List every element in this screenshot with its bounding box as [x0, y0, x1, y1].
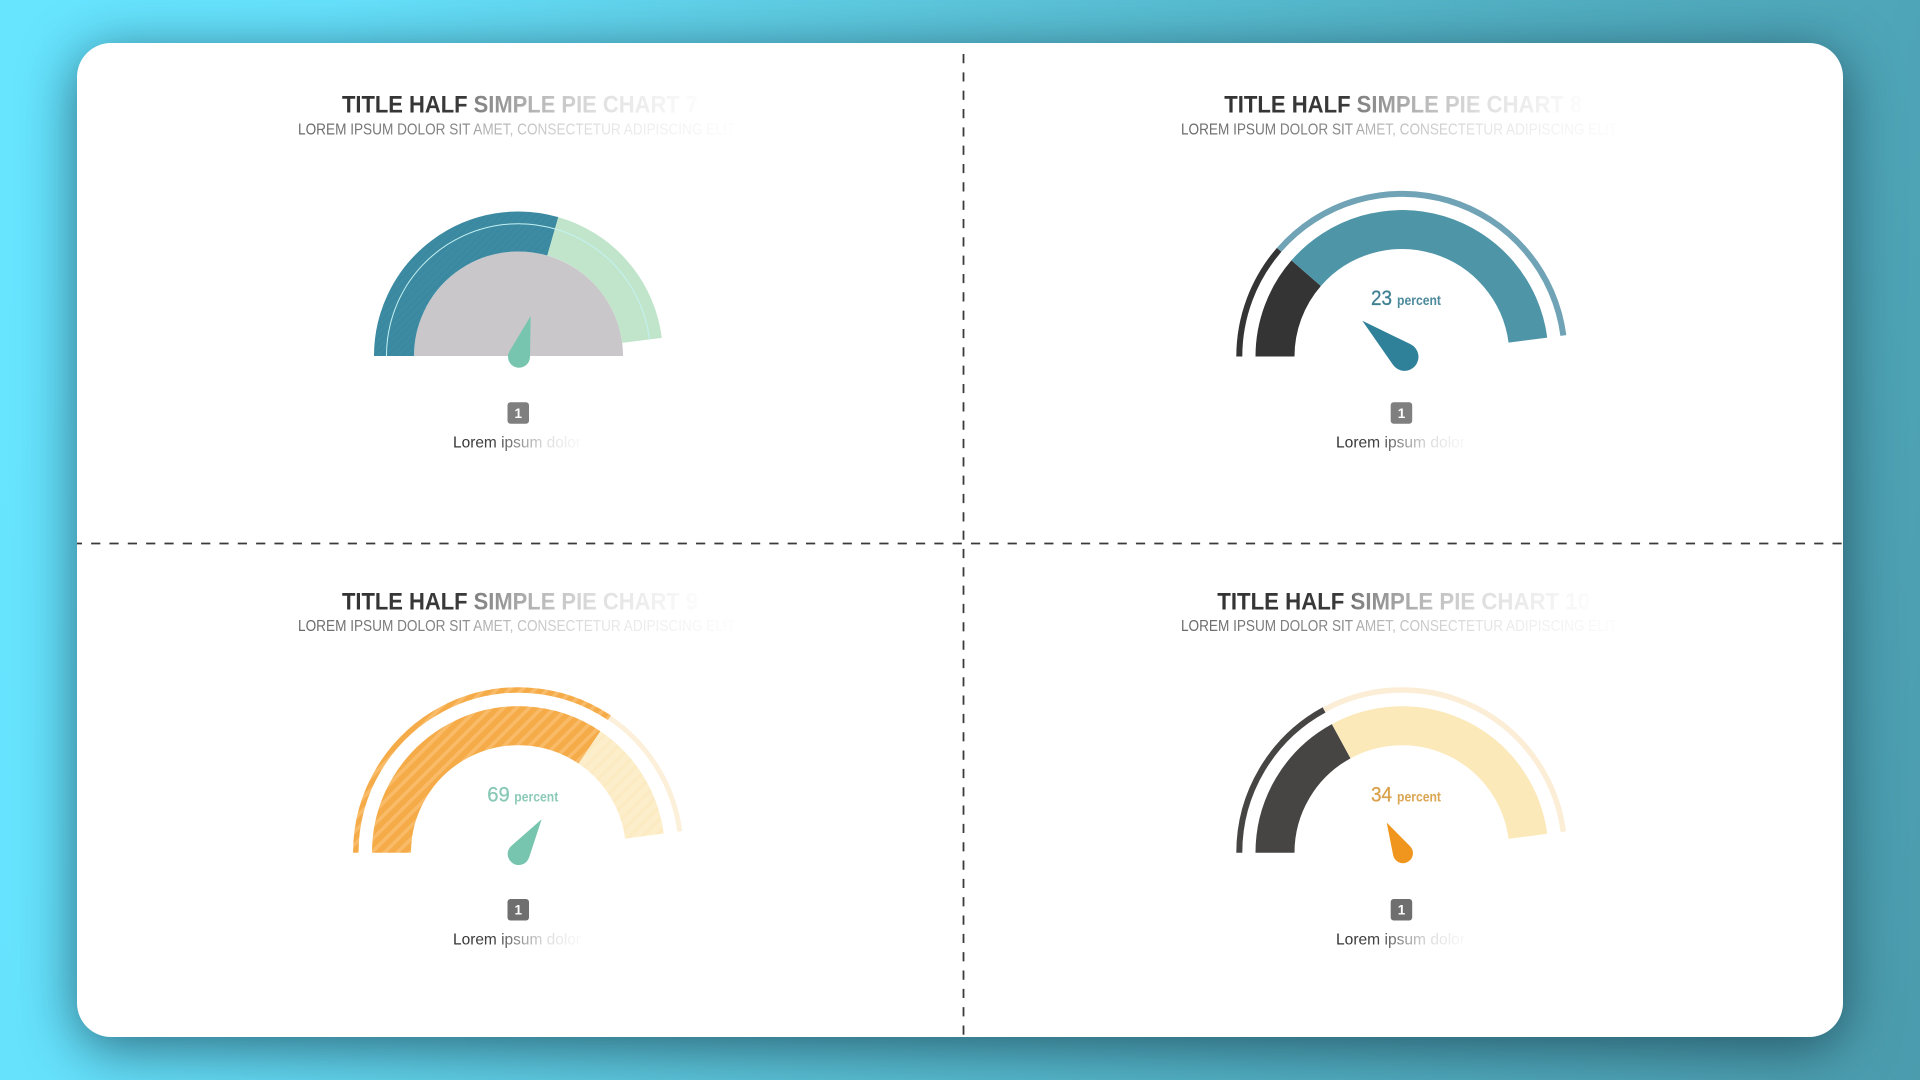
number badge: 1: [515, 406, 523, 421]
subheading: LOREM IPSUM DOLOR SIT AMET, CONSECTETUR ADIPISCING ELIT: [1181, 618, 1617, 635]
heading: TITLE HALF SIMPLE PIE CHART 8: [1224, 92, 1582, 118]
number badge: [508, 899, 529, 920]
value: 34 percent: percent: [1397, 790, 1441, 805]
vertical dashed divider: [962, 54, 964, 1037]
needle: [505, 313, 541, 370]
label: Lorem ipsum dolor: [1336, 931, 1466, 948]
panel: pie chart 7: [298, 92, 735, 452]
value: 34 percent: [1371, 784, 1441, 807]
subheading: LOREM IPSUM DOLOR SIT AMET, CONSECTETUR ADIPISCING ELIT: [1181, 121, 1617, 138]
number badge: [508, 402, 529, 424]
value: 23 percent: 23: [1371, 287, 1392, 310]
gauge chart: [1239, 690, 1563, 853]
gauge chart: [386, 224, 650, 356]
needle: [1378, 818, 1416, 867]
heading: TITLE HALF SIMPLE PIE CHART 10: [1217, 588, 1590, 615]
value: 69 percent: [487, 784, 559, 807]
value: 34 percent: 34: [1371, 784, 1392, 807]
subheading: LOREM IPSUM DOLOR SIT AMET, CONSECTETUR ADIPISCING ELIT: [298, 121, 735, 138]
number badge: [1391, 899, 1412, 920]
number badge: 1: [515, 903, 523, 918]
number badge: 1: [1398, 903, 1406, 918]
gauge chart: [1239, 194, 1563, 356]
label: Lorem ipsum dolor: [1336, 435, 1466, 452]
value: 23 percent: [1371, 287, 1441, 310]
needle: [503, 813, 551, 869]
number badge: [1391, 402, 1412, 424]
panel: pie chart 10: [1181, 588, 1617, 948]
heading: TITLE HALF SIMPLE PIE CHART 7: [342, 92, 698, 118]
label: Lorem ipsum dolor: [453, 435, 582, 452]
value: 69 percent: 69: [487, 784, 510, 807]
value: 69 percent: percent: [514, 790, 559, 805]
gauge chart: [356, 690, 680, 853]
panel: pie chart 9: [298, 588, 735, 948]
subheading: LOREM IPSUM DOLOR SIT AMET, CONSECTETUR ADIPISCING ELIT: [298, 618, 735, 635]
heading: TITLE HALF SIMPLE PIE CHART 9: [342, 588, 698, 615]
horizontal dashed divider: [77, 542, 1843, 544]
number badge: 1: [1398, 406, 1406, 421]
panel: pie chart 8: [1181, 92, 1617, 452]
value: 23 percent: percent: [1397, 293, 1441, 308]
needle: [1353, 310, 1424, 377]
label: Lorem ipsum dolor: [453, 931, 582, 948]
